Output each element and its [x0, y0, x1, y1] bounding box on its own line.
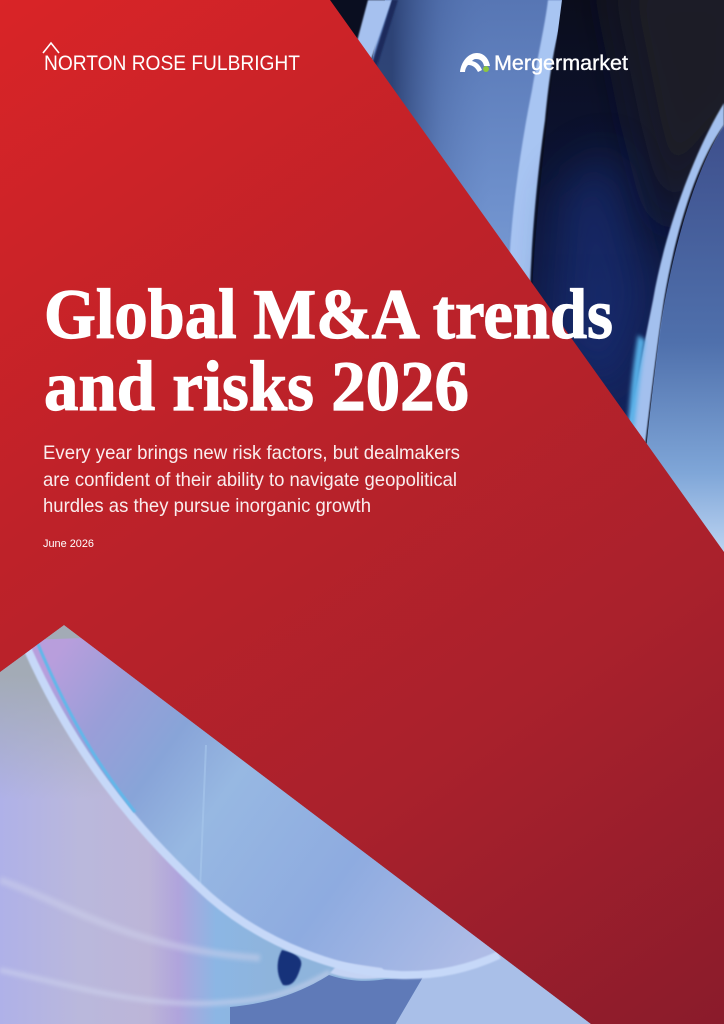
logo: Mergermarket: Mergermarket — [494, 52, 628, 75]
title: Global M&A trends — [44, 276, 613, 354]
subtitle: hurdles as they pursue inorganic growth — [43, 495, 371, 517]
subtitle: Every year brings new risk factors, but dealmakers — [43, 442, 460, 464]
date: June 2026 — [43, 538, 94, 550]
subtitle: are confident of their ability to navigate geopolitical — [43, 469, 457, 491]
image panel: bottom left abstract glass — [0, 620, 600, 1024]
logo: Norton Rose Fulbright: NORTON ROSE FULBRIGHT — [44, 52, 300, 75]
logo: Norton Rose Fulbright — [43, 43, 300, 75]
title — [44, 276, 613, 426]
subtitle — [43, 442, 460, 517]
image panel: top right abstract glass — [320, 0, 724, 570]
title: and risks 2026 — [44, 348, 469, 426]
